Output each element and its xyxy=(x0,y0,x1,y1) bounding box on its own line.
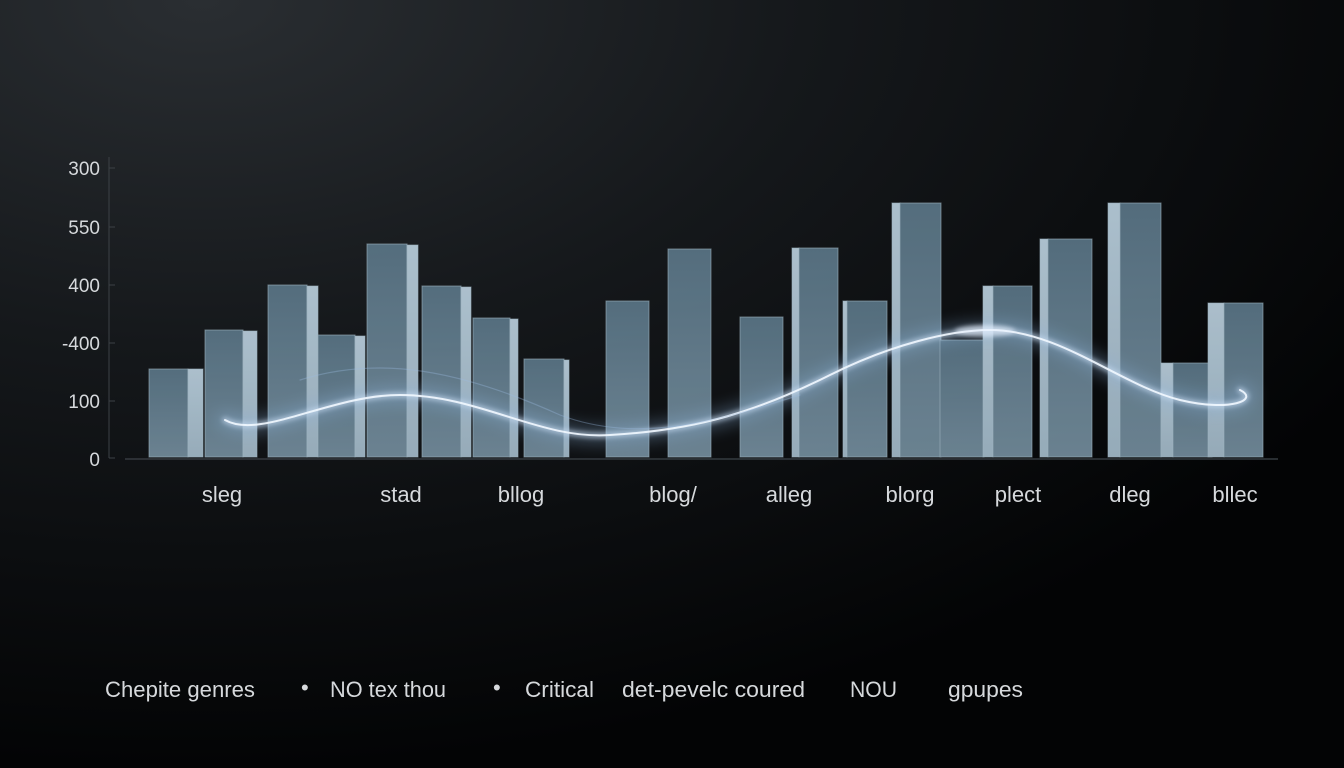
bottom caption row: Critical xyxy=(525,677,594,702)
bottom caption row: NOU xyxy=(850,677,897,702)
x axis labels: dleg xyxy=(1109,482,1151,507)
x axis line xyxy=(125,458,1278,460)
x axis labels: alleg xyxy=(766,482,812,507)
bottom caption row xyxy=(105,675,1023,702)
x axis labels xyxy=(202,482,1258,507)
y axis: -400 xyxy=(62,334,100,355)
bottom caption row: gpupes xyxy=(948,677,1023,702)
y axis: 400 xyxy=(68,276,100,297)
x axis labels: blog/ xyxy=(649,482,698,507)
x axis labels: bllec xyxy=(1212,482,1258,507)
y axis: 100 xyxy=(68,392,100,413)
x axis labels: sleg xyxy=(202,482,242,507)
x axis labels: blorg xyxy=(886,482,934,507)
y axis: 0 xyxy=(89,450,100,471)
bottom caption row: NO tex thou xyxy=(330,677,446,702)
x axis labels: plect xyxy=(995,482,1041,507)
x axis labels: stad xyxy=(380,482,422,507)
bottom caption row: • xyxy=(301,675,309,700)
x axis labels: bllog xyxy=(498,482,544,507)
y axis: 550 xyxy=(68,218,100,239)
glowing wave xyxy=(225,325,1246,435)
bottom caption row: det-pevelc coured xyxy=(622,677,805,702)
bottom caption row: Chepite genres xyxy=(105,677,255,702)
bars xyxy=(149,203,1263,457)
y axis: 300 xyxy=(68,159,100,180)
bottom caption row: • xyxy=(493,675,501,700)
y axis xyxy=(62,157,115,471)
